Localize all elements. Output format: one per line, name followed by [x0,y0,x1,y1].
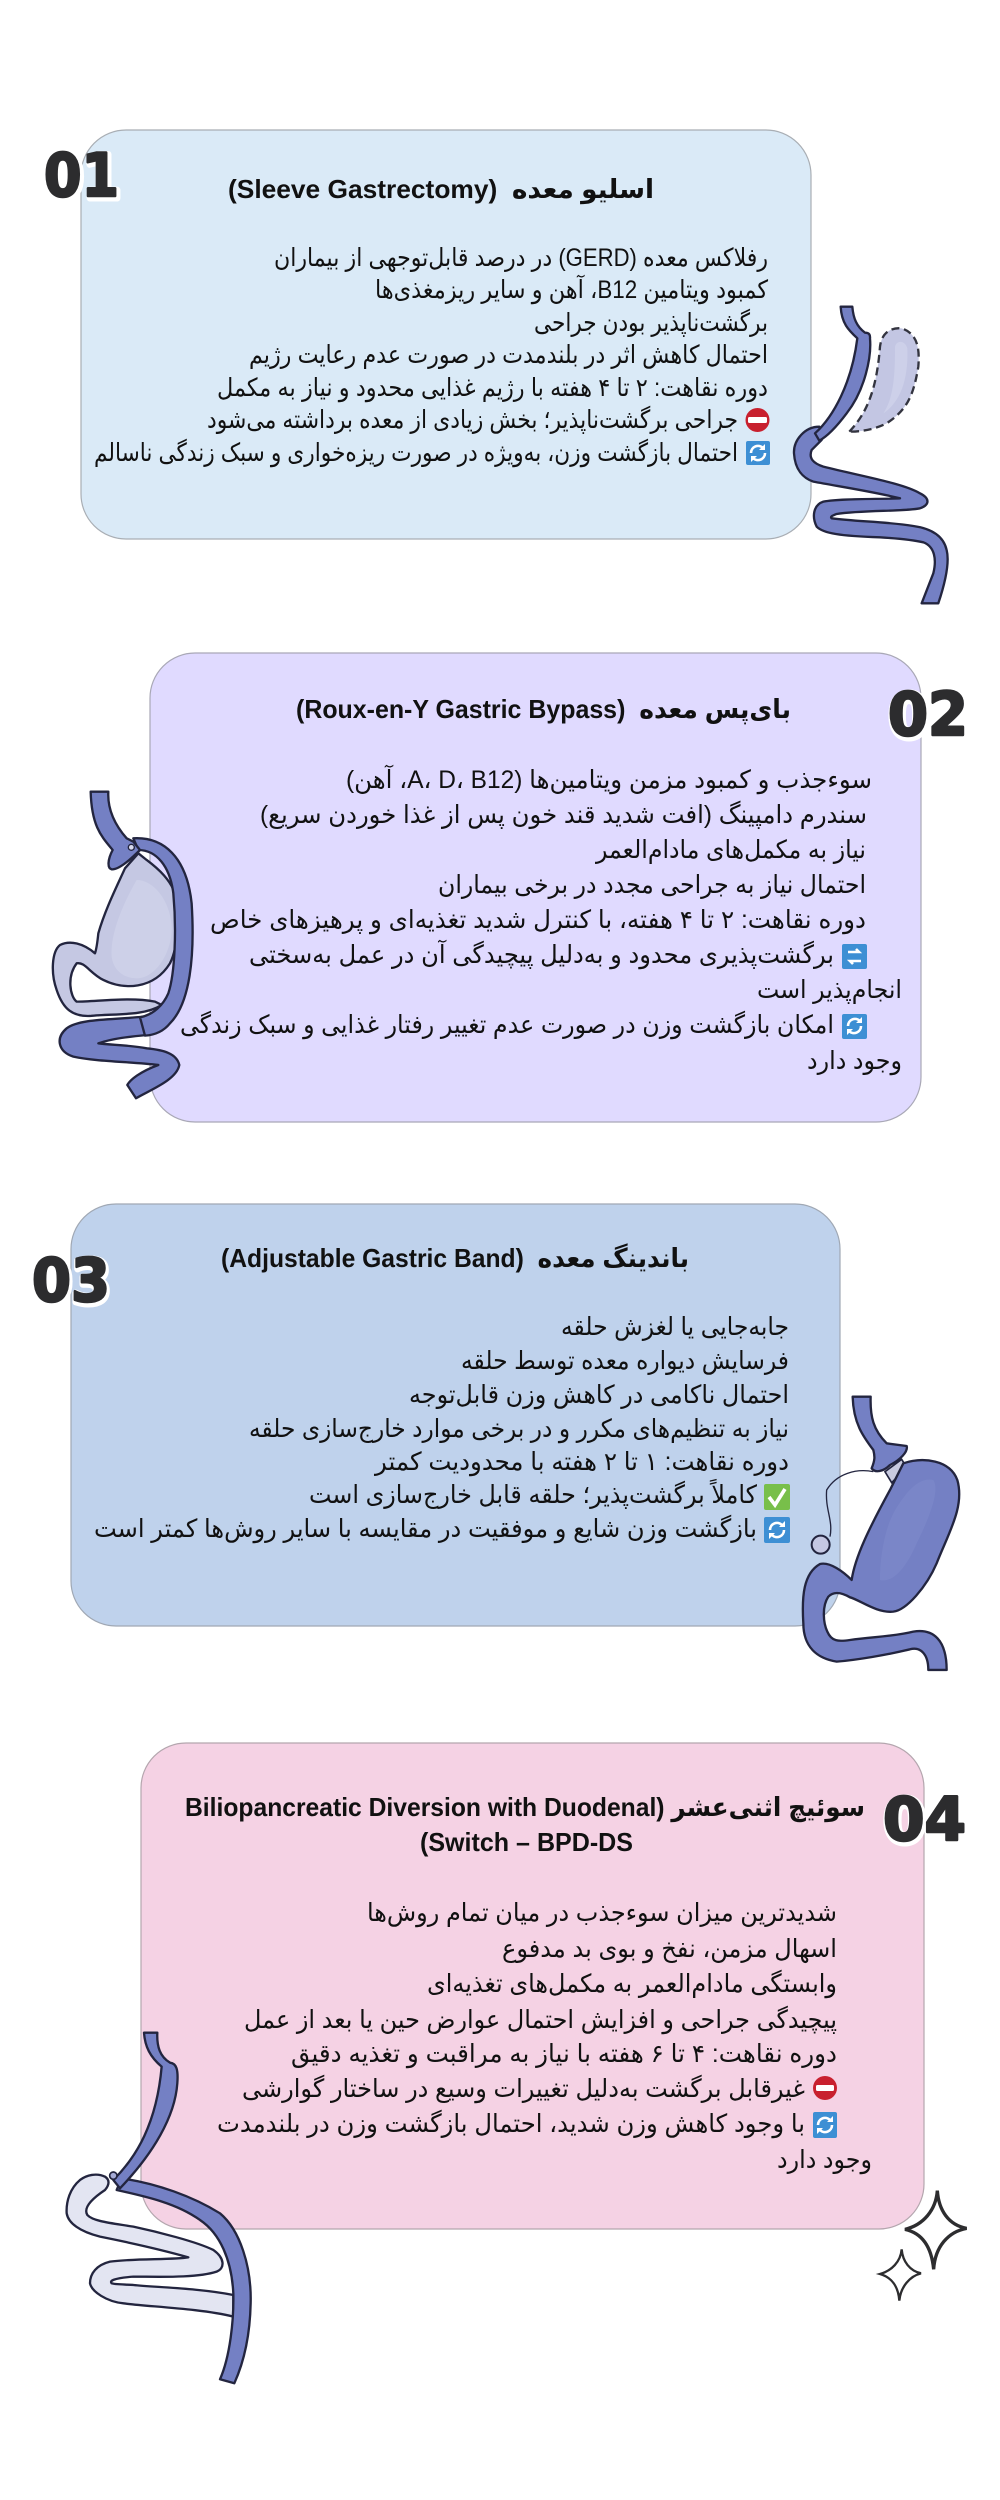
text block: bypass complications: برگشت‌پذیری محدود و به‌دلیل پیچیدگی آن در عمل به‌سختی [249,939,834,970]
bypassed stomach [53,853,178,1016]
heading: BPD-DS [185,1792,865,1857]
icon: no entry [746,408,770,432]
panel: gastric bypass [53,653,921,1122]
text block: BPD-DS complications [217,1899,872,2175]
icon: refresh [813,2112,837,2138]
access tube [826,1471,873,1537]
sleeve and esophagus [815,307,870,441]
text block: band complications: بازگشت وزن شایع و موفقیت در مقایسه با سایر روش‌ها کمتر است [94,1514,757,1544]
text block: bypass complications: دوره نقاهت: ۲ تا ۴ هفته، با کنترل شدید تغذیه‌ای و پرهیزهای خاص [210,906,866,935]
stomach band [885,1459,907,1483]
text block: BPD-DS complications: وابستگی مادام‌العمر به مکمل‌های تغذیه‌ای [427,1969,837,1999]
text block: bypass complications: سوءجذب و کمبود مزمن ویتامین‌ها (A، D، B12، آهن) [346,764,872,795]
icon: refresh weight regain [842,1014,867,1039]
white bypassed intestine [67,2175,233,2317]
text block: bypass complications [180,764,902,1076]
number: 02: 02 [889,682,969,752]
text block: bypass complications: نیاز به مکمل‌های مادام‌العمر [594,836,866,864]
access port [812,1536,830,1554]
panel: adjustable gastric band [71,1204,959,1670]
number: 02: 02 [888,680,968,750]
text block: band complications: نیاز به تنظیم‌های مکرر و در برخی موارد خارج‌سازی حلقه [249,1415,789,1444]
text block: sleeve complications: دوره نقاهت: ۲ تا ۴ هفته با رژیم غذایی محدود و نیاز به مکمل [217,374,768,403]
text block: BPD-DS complications: پیچیدگی جراحی و افزایش احتمال عوارض حین یا بعد از عمل [244,2005,837,2035]
icon: check mark [764,1484,790,1510]
sleeve and esophagus [113,2033,178,2188]
text block: bypass complications: احتمال نیاز به جراحی مجدد در برخی بیماران [438,871,866,899]
text block: BPD-DS complications: با وجود کاهش وزن شدید، احتمال بازگشت وزن در بلندمدت [217,2109,805,2139]
card background: band [71,1204,840,1626]
panel: sleeve gastrectomy [81,130,948,603]
decoration: sparkles [880,2191,967,2301]
text block: bypass complications: امکان بازگشت وزن در صورت عدم تغییر رفتار غذایی و سبک زندگی [180,1010,834,1040]
card background: sleeve [81,130,811,539]
roux limb [133,838,193,1036]
esophagus and pouch [91,792,140,869]
illustration: sleeve stomach [794,307,948,603]
esophagus [853,1397,907,1471]
small intestine [794,427,948,603]
common limb [117,2178,251,2383]
text block: sleeve complications: رفلاکس معده (GERD) در درصد قابل‌توجهی از بیماران [274,244,768,273]
number: 03: 03 [33,1248,111,1318]
large sparkle [905,2191,967,2269]
text block: sleeve complications: برگشت‌ناپذیر بودن جراحی [534,308,768,337]
lower intestine [60,1017,179,1098]
icon: no entry [813,2076,837,2100]
illustration: banded stomach [803,1397,959,1670]
text block: band complications: دوره نقاهت: ۱ تا ۲ هفته با محدودیت کمتر [373,1448,789,1477]
text block: BPD-DS complications: شدیدترین میزان سوءجذب در میان تمام روش‌ها [367,1899,837,1928]
icon: refresh reversibility [842,944,867,969]
text block: sleeve complications: کمبود ویتامین B12، آهن و سایر ریزمغذی‌ها [375,274,768,305]
icon: refresh [764,1517,790,1543]
removed stomach portion [849,328,919,432]
card background: BPD-DS [141,1743,924,2229]
text block: bypass complications: سندرم دامپینگ (افت شدید قند خون پس از غذا خوردن سریع) [260,800,867,830]
number: 01: 01 [46,143,121,213]
text block: sleeve complications: احتمال کاهش اثر در بلندمدت در صورت عدم رعایت رژیم [249,341,768,370]
text block: band complications: کاملاً برگشت‌پذیر؛ حلقه قابل خارج‌سازی است [309,1478,757,1510]
text block: bypass complications: وجود دارد [807,1047,902,1076]
small sparkle [880,2249,921,2301]
heading: BPD-DS: Switch – BPD-DS) [420,1827,633,1857]
number: 04: 04 [884,1787,967,1857]
text block: sleeve complications: جراحی برگشت‌ناپذیر؛ بخش زیادی از معده برداشته می‌شود [207,405,738,434]
icon: refresh [746,441,770,465]
text block: band complications: احتمال ناکامی در کاهش وزن قابل‌توجه [409,1381,789,1410]
text block: sleeve complications [94,244,768,468]
heading: sleeve gastrectomy: اسلیو معده (Sleeve Gastrectomy) [228,174,654,205]
heading: BPD-DS: سوئیچ اثنی‌عشر (Biliopancreatic Diversion with Duodenal [185,1792,865,1823]
number: 03: 03 [32,1246,110,1316]
number: 04: 04 [883,1785,966,1855]
illustration: bypass stomach [53,792,193,1098]
card background: bypass [150,653,921,1122]
heading: gastric bypass: بای‌پس معده (Roux-en-Y Gastric Bypass) [296,694,791,724]
text block: band complications [94,1313,789,1544]
number: 01: 01 [44,141,119,211]
text block: BPD-DS complications: اسهال مزمن، نفخ و بوی بد مدفوع [502,1935,837,1964]
text block: band complications: فرسایش دیواره معده توسط حلقه [461,1347,789,1375]
illustration: duodenal switch [67,2033,251,2383]
text block: band complications: جابه‌جایی یا لغزش حلقه [561,1313,789,1341]
text block: BPD-DS complications: وجود دارد [777,2146,872,2175]
stomach and intestine [803,1460,959,1670]
panel: biliopancreatic diversion [67,1743,924,2383]
heading: gastric band: باندینگ معده (Adjustable Gastric Band) [221,1243,689,1273]
text block: sleeve complications: احتمال بازگشت وزن، به‌ویژه در صورت ریزه‌خواری و سبک زندگی ناسالم [94,438,738,468]
text block: BPD-DS complications: غیرقابل برگشت به‌دلیل تغییرات وسیع در ساختار گوارشی [242,2074,805,2104]
text block: bypass complications: انجام‌پذیر است [757,976,902,1004]
text block: BPD-DS complications: دوره نقاهت: ۴ تا ۶ هفته با نیاز به مراقبت و تغذیه دقیق [291,2040,837,2069]
